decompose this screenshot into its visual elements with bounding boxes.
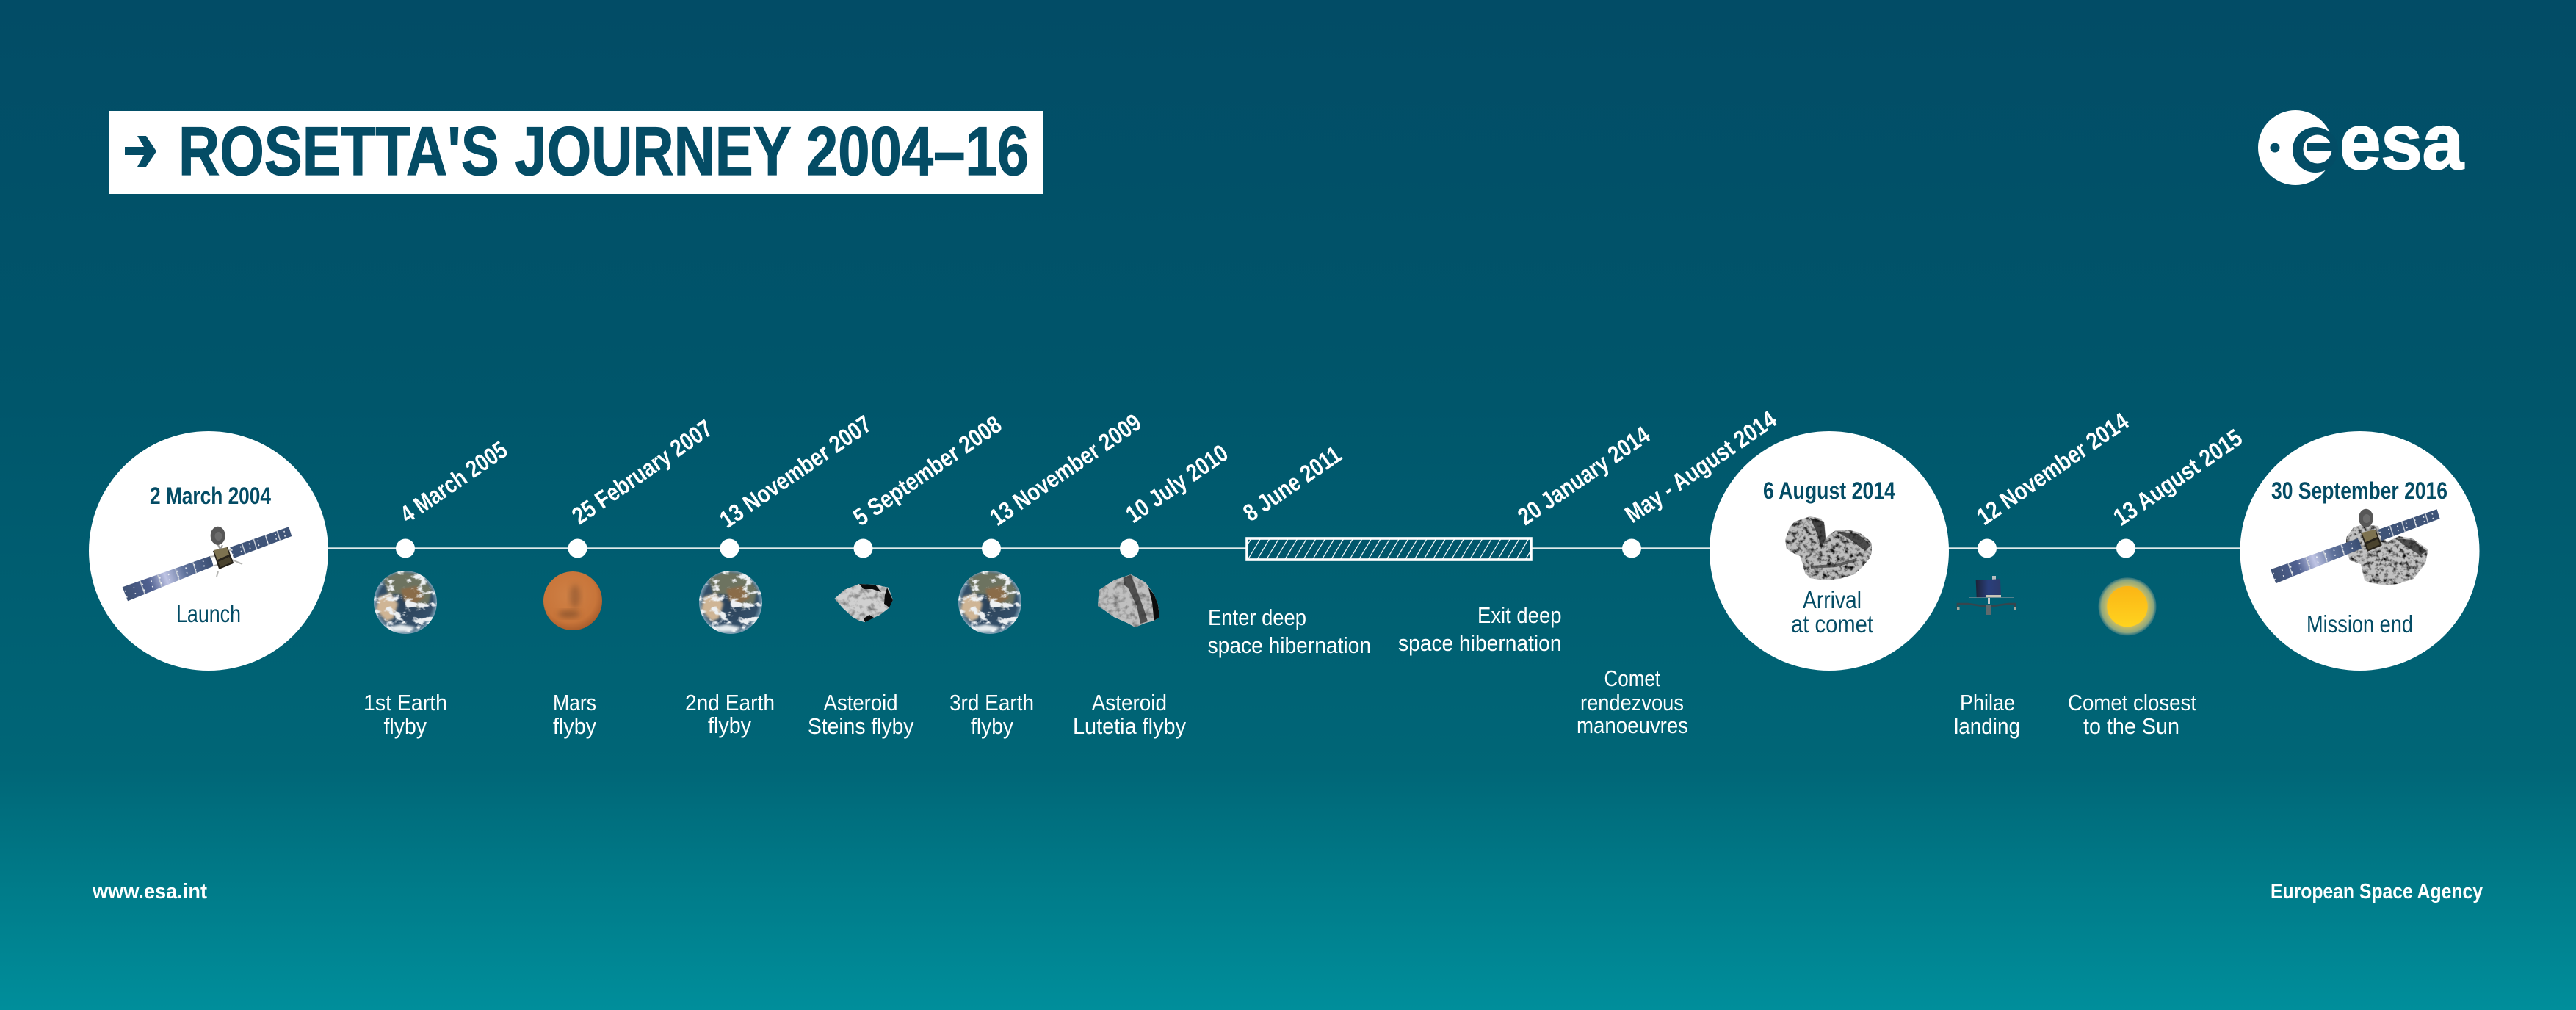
icon: Earth 1 <box>374 571 437 634</box>
label: Comet rendezvous manoeuvres: manoeuvres <box>1577 713 1688 738</box>
label: Philae landing <box>1954 690 2020 739</box>
label: 2nd Earth flyby: flyby <box>708 713 751 738</box>
dates: 12 November 2014 <box>1972 407 2134 530</box>
timeline line <box>328 547 2240 549</box>
panel: mission end <box>2240 431 2479 671</box>
label: Comet rendezvous manoeuvres: rendezvous <box>1580 690 1684 715</box>
label: Comet closest to the Sun <box>2068 690 2196 739</box>
panel: launch <box>89 431 328 671</box>
label: 1st Earth flyby: 1st Earth <box>363 690 447 715</box>
logo: esa <box>2258 97 2464 186</box>
label: Asteroid Lutetia flyby <box>1073 690 1186 739</box>
icon: title arrow <box>125 136 156 167</box>
panel: arrival at comet: at comet <box>1791 610 1873 638</box>
icon: Earth 2 <box>699 571 762 634</box>
label: Exit deep space hibernation: Exit deep <box>1477 602 1561 628</box>
dates: 20 January 2014 <box>1513 421 1655 530</box>
icon: asteroid Steins <box>834 584 893 622</box>
label: Comet rendezvous manoeuvres: Comet <box>1604 665 1660 691</box>
dates: 13 August 2015 <box>2108 424 2247 531</box>
panel: mission end: 30 September 2016 <box>2271 477 2447 504</box>
icon: Philae lander <box>1957 576 2016 615</box>
icon: comet <box>1785 516 1872 580</box>
label: Exit deep space hibernation: space hibernation <box>1398 630 1561 656</box>
label: Asteroid Steins flyby <box>808 690 914 739</box>
icon: asteroid Lutetia <box>1098 574 1159 627</box>
label: Comet closest to the Sun: Comet closest <box>2068 690 2196 715</box>
panel: launch: Launch <box>176 600 241 627</box>
label: Asteroid Steins flyby: Asteroid <box>824 690 898 715</box>
label: Philae landing: Philae <box>1960 690 2015 715</box>
hibernation bar <box>1247 538 1531 560</box>
label: 1st Earth flyby <box>363 690 447 739</box>
label: 2nd Earth flyby <box>685 690 775 738</box>
panel: arrival at comet: 6 August 2014 <box>1763 477 1895 504</box>
label: Mars flyby: flyby <box>553 713 596 739</box>
label: Philae landing: landing <box>1954 713 2020 739</box>
label: Asteroid Lutetia flyby: Lutetia flyby <box>1073 713 1186 739</box>
dates: 4 March 2005 <box>395 436 512 528</box>
label: Enter deep space hibernation: Enter deep <box>1208 605 1306 630</box>
label: Asteroid Lutetia flyby: Asteroid <box>1092 690 1167 715</box>
panel: arrival at comet <box>1710 431 1949 671</box>
logo: esa: esa <box>2340 97 2464 186</box>
label: Enter deep space hibernation: space hibernation <box>1208 632 1371 658</box>
label: 3rd Earth flyby <box>949 690 1034 739</box>
panel: mission end: Mission end <box>2307 610 2413 638</box>
label: 1st Earth flyby: flyby <box>383 713 427 739</box>
title: ROSETTA'S JOURNEY 2004–16 <box>178 112 1029 190</box>
label: 3rd Earth flyby: 3rd Earth <box>949 690 1034 715</box>
dates: 13 November 2007 <box>714 410 876 533</box>
footer: agency name: European Space Agency <box>2271 880 2483 903</box>
dates: 13 November 2009 <box>985 408 1146 531</box>
icon: Sun <box>2099 577 2156 635</box>
label: 3rd Earth flyby: flyby <box>971 713 1013 739</box>
footer: website: www.esa.int <box>92 880 207 903</box>
dates: May - August 2014 <box>1620 405 1781 528</box>
label: Comet rendezvous manoeuvres <box>1577 665 1688 738</box>
icon: comet under spacecraft <box>2346 524 2428 585</box>
timeline dots <box>396 539 2135 558</box>
label: Enter deep space hibernation <box>1208 605 1371 658</box>
icon: Mars <box>543 571 602 630</box>
label: Mars flyby <box>553 690 596 739</box>
label: Asteroid Steins flyby: Steins flyby <box>808 713 914 739</box>
label: Comet closest to the Sun: to the Sun <box>2083 713 2179 739</box>
panel: launch: 2 March 2004 <box>150 483 271 509</box>
icon: Earth 3 <box>958 571 1021 634</box>
panel: arrival at comet: Arrival <box>1803 586 1862 613</box>
icon: spacecraft <box>2271 509 2440 583</box>
label: Mars flyby: Mars <box>553 690 596 715</box>
label: Exit deep space hibernation <box>1398 602 1561 656</box>
dates: 5 September 2008 <box>848 411 1006 531</box>
dates: 8 June 2011 <box>1238 441 1346 527</box>
dates: 25 February 2007 <box>567 414 717 530</box>
dates <box>395 405 2247 533</box>
dates: 10 July 2010 <box>1121 439 1233 528</box>
icon: Rosetta spacecraft <box>123 527 292 601</box>
label: 2nd Earth flyby: 2nd Earth <box>685 690 775 715</box>
